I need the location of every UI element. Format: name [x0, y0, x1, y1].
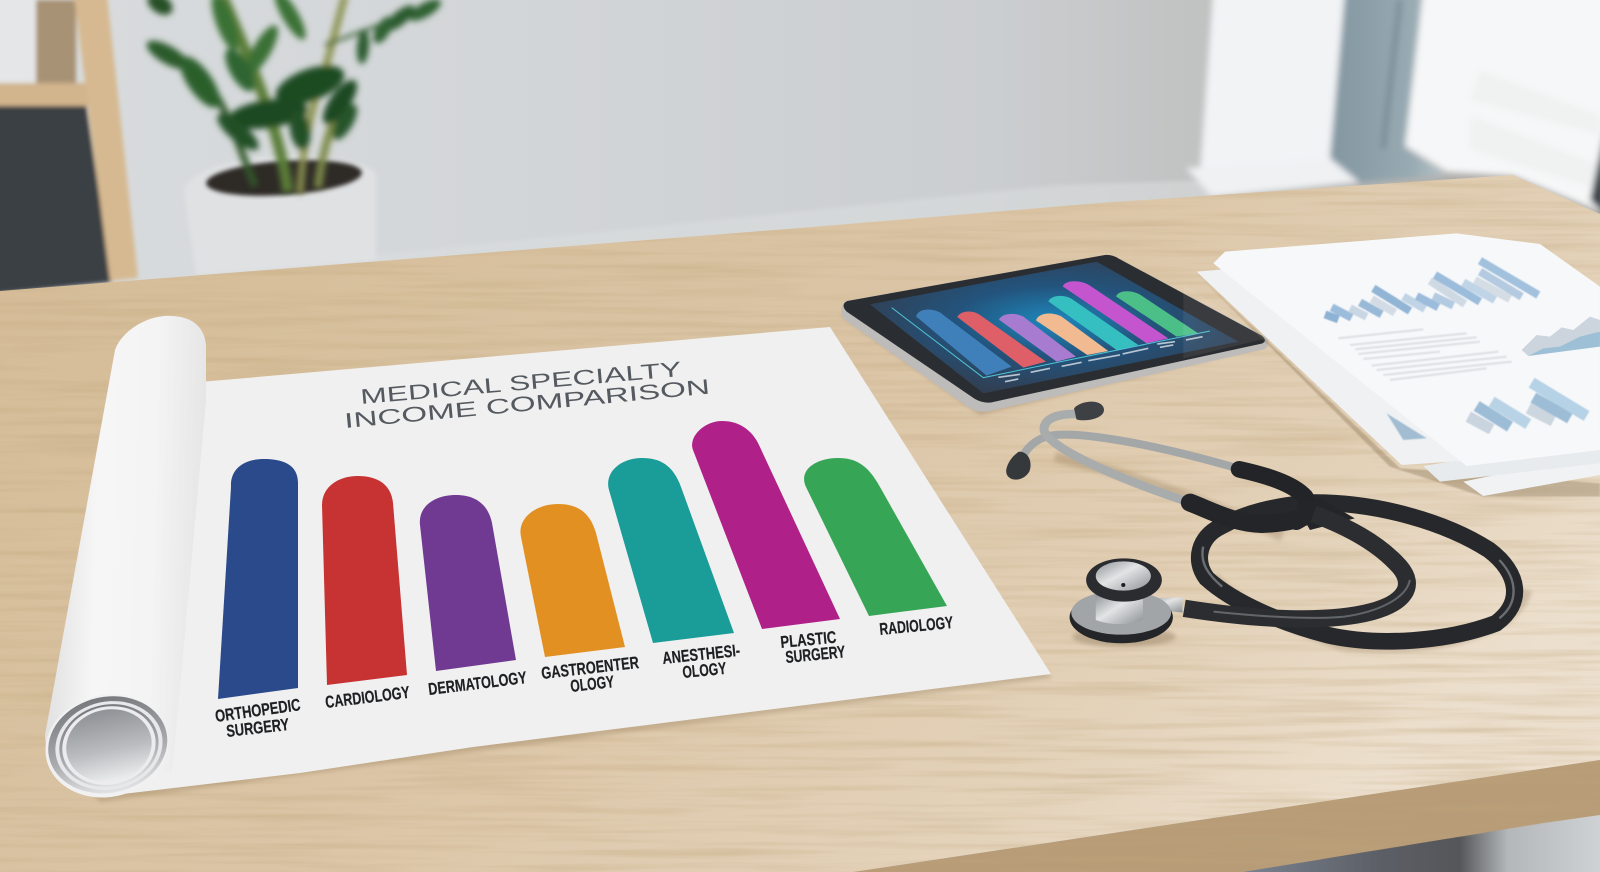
bottom bar chart	[1468, 383, 1587, 429]
bar: orthopedic surgery	[218, 459, 298, 699]
rear coil of tubing	[1199, 503, 1515, 641]
black front sleeve	[1190, 503, 1312, 524]
chart axes	[892, 308, 1210, 378]
label: gastroenterology: GASTROENTER	[540, 653, 640, 683]
diaphragm rim	[1086, 558, 1162, 602]
Y junction	[1296, 498, 1355, 530]
top report sheet	[1213, 233, 1600, 466]
label: dermatology: DERMATOLOGY	[427, 668, 528, 699]
bar chart	[218, 421, 947, 699]
paper turn	[47, 691, 171, 800]
roll body	[45, 316, 206, 797]
area chart front	[1528, 332, 1600, 356]
chart title	[343, 358, 711, 433]
screen	[870, 262, 1238, 393]
label: anesthesiology	[661, 641, 741, 682]
tablet	[840, 255, 1270, 415]
desk front edge	[853, 760, 1600, 872]
bar labels	[214, 613, 955, 741]
window frame	[1330, 0, 1447, 183]
floor below desk	[1230, 812, 1600, 872]
black bezel	[843, 255, 1265, 403]
label: cardiology: CARDIOLOGY	[324, 683, 411, 712]
bar: cardiology	[322, 476, 407, 685]
white box on shelf	[0, 0, 36, 86]
label: gastroenterology: OLOGY	[569, 672, 616, 696]
tube shadow	[1055, 457, 1527, 648]
pillar	[1200, 0, 1345, 172]
middle sheet	[1423, 437, 1600, 482]
connector stem	[1145, 597, 1183, 613]
label: gastroenterology	[540, 653, 640, 696]
silver chassis	[841, 255, 1268, 412]
bar: green	[1116, 291, 1198, 337]
dark turn	[39, 685, 176, 804]
label: radiology: RADIOLOGY	[879, 613, 955, 639]
report papers	[1197, 233, 1600, 497]
window sill	[1186, 160, 1360, 197]
bar: red	[957, 311, 1046, 368]
title line 2: INCOME COMPARISON	[343, 376, 711, 433]
lower report sheet	[1197, 269, 1523, 465]
title line 1: MEDICAL SPECIALTY	[359, 358, 682, 409]
label: orthopedic surgery: SURGERY	[225, 715, 291, 741]
pot	[184, 156, 376, 276]
tablet shadow	[840, 312, 1270, 415]
wall baseboard band	[375, 180, 1213, 280]
text block lines	[1338, 329, 1512, 380]
metal binaural rear	[1021, 435, 1234, 467]
diaphragm hole	[1121, 583, 1125, 587]
bottom sheet	[1463, 453, 1600, 496]
paper shadow	[1197, 273, 1600, 497]
label: orthopedic surgery	[214, 695, 302, 741]
rolled end of poster	[36, 316, 206, 809]
shelf back	[0, 0, 76, 92]
dark frame line	[1383, 0, 1400, 148]
main tube loop	[1184, 514, 1407, 619]
dark turn inner	[52, 695, 166, 796]
label: orthopedic surgery: ORTHOPEDIC	[214, 695, 302, 726]
poster sheet	[97, 327, 1051, 797]
window glass	[1405, 0, 1600, 215]
dark corner at right edge	[1590, 125, 1600, 216]
diaphragm	[1096, 561, 1151, 591]
rear coil highlight	[1202, 547, 1514, 618]
window glare bands	[1470, 70, 1600, 190]
upper ear tip	[1074, 402, 1104, 420]
lower ear tip	[1006, 452, 1031, 480]
bar: radiology	[804, 458, 947, 616]
lower bell	[1071, 591, 1171, 635]
chestpiece shadow	[1072, 627, 1176, 647]
label: anesthesiology: OLOGY	[682, 659, 728, 682]
bar: peach	[1036, 314, 1108, 355]
label: plastic surgery	[780, 628, 847, 667]
desk top	[0, 175, 1600, 872]
bar: lilac	[999, 314, 1076, 362]
outer layer	[36, 683, 178, 809]
window and white pillar	[1186, 0, 1600, 216]
poster shadow	[60, 664, 1052, 802]
shelf board	[0, 83, 88, 106]
shelf post	[74, 0, 138, 281]
dark cabinet	[0, 104, 112, 294]
bookshelf	[0, 0, 138, 294]
label: anesthesiology: ANESTHESI-	[661, 641, 741, 668]
main tube highlight	[1214, 580, 1410, 618]
stethoscope	[1006, 402, 1527, 648]
foliage	[143, 0, 444, 194]
label: plastic surgery: SURGERY	[785, 642, 847, 667]
photo on lower sheet	[1387, 413, 1427, 440]
tablet axis labels	[998, 337, 1203, 382]
soil	[205, 156, 363, 200]
bar: teal	[1048, 296, 1138, 350]
black rear sleeve	[1239, 469, 1308, 522]
label: plastic surgery: PLASTIC	[780, 628, 837, 652]
lower bell rim	[1070, 591, 1173, 643]
stem	[1096, 593, 1143, 624]
metal binaural front	[1044, 414, 1184, 501]
screen glare	[1183, 283, 1267, 358]
chestpiece	[1070, 558, 1183, 643]
top bar chart	[1325, 261, 1538, 319]
bar: magenta	[1063, 281, 1168, 343]
roll opening	[36, 683, 178, 809]
bar: plastic surgery	[692, 421, 840, 629]
bar: gastroenterology	[520, 504, 625, 657]
area chart	[1522, 317, 1600, 356]
paper turn inner	[55, 698, 163, 794]
background wall	[0, 0, 1600, 300]
bar: anesthesiology	[608, 458, 734, 643]
hollow centre	[59, 701, 159, 790]
bar: dermatology	[420, 495, 516, 671]
bar: blue	[916, 310, 1012, 376]
plant in white pot	[143, 0, 444, 276]
